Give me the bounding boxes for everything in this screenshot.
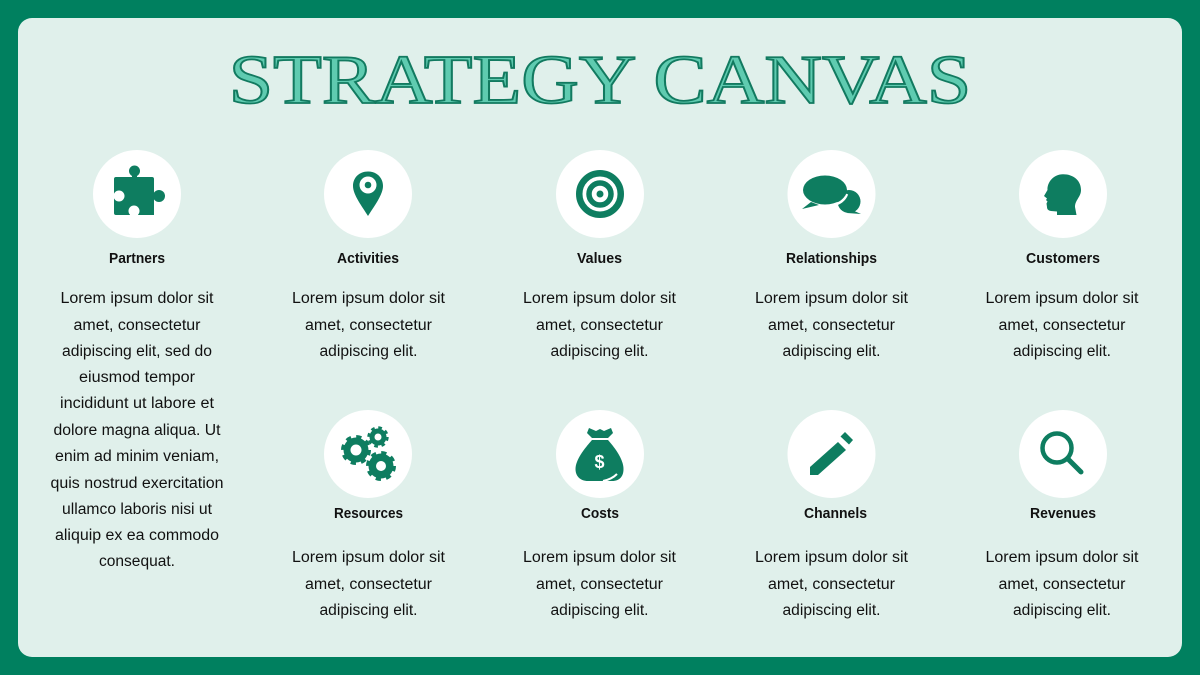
text block: customers [986,290,1139,360]
title: STRATEGY CANVAS [229,41,971,119]
heading: activities: Activities [337,251,399,267]
text block: costs: adipiscing elit. [550,602,648,619]
text block: resources: amet, consectetur [305,576,432,593]
text block: partners: consequat. [99,553,175,570]
icon: magnifier [1019,410,1107,498]
panel: activities [292,150,446,360]
text block: activities: Lorem ipsum dolor sit [292,290,446,307]
heading: revenues: Revenues [1030,506,1096,522]
text block: partners: aliquip ex ea commodo [55,527,219,544]
text block: partners: dolore magna aliqua. Ut [54,422,221,439]
text block: partners: adipiscing elit, sed do [62,343,212,360]
text block: costs: amet, consectetur [536,576,663,593]
icon: target [556,150,644,238]
text block: partners: incididunt ut labore et [60,395,215,412]
icon: gears [324,410,412,498]
panel: resources [292,410,446,619]
text block: values: amet, consectetur [536,317,663,334]
heading: costs: Costs [581,506,619,522]
text block: relationships: Lorem ipsum dolor sit [755,290,909,307]
text block: channels [755,549,909,619]
heading: customers: Customers [1026,251,1100,267]
text block: revenues: amet, consectetur [998,576,1126,593]
panel: revenues [986,410,1139,619]
panel: channels [755,410,909,619]
icon: puzzle piece [93,150,181,238]
text block: costs: Lorem ipsum dolor sit [523,549,677,566]
text block: relationships: amet, consectetur [768,317,895,334]
text block: partners [50,290,224,570]
heading: values: Values [577,251,622,267]
text block: partners: amet, consectetur [74,317,200,334]
text block: customers: Lorem ipsum dolor sit [986,290,1139,307]
text block: relationships: adipiscing elit. [782,343,880,360]
text block: partners: enim ad minim veniam, [55,448,219,465]
text block: resources: Lorem ipsum dolor sit [292,549,446,566]
text block: customers: adipiscing elit. [1013,343,1111,360]
text block: channels: amet, consectetur [768,576,895,593]
text block: resources [292,549,446,619]
text block: resources: adipiscing elit. [320,602,418,619]
text block: activities: amet, consectetur [305,317,432,334]
text block: values [523,290,677,360]
icon: pencil [788,410,876,498]
heading: resources: Resources [334,506,403,522]
text block: partners: Lorem ipsum dolor sit [60,290,214,307]
heading: relationships: Relationships [786,251,877,267]
text block: revenues: adipiscing elit. [1013,602,1111,619]
text block: activities [292,290,446,360]
text block: customers: amet, consectetur [998,317,1126,334]
text block: values: adipiscing elit. [550,343,648,360]
text block: partners: ullamco laboris nisi ut [62,501,213,518]
panel: relationships [755,150,909,360]
icon: money bag: $ [594,452,605,472]
icon: speech bubbles [788,150,876,238]
panel: customers [986,150,1139,360]
text block: relationships [755,290,909,360]
text block: costs [523,549,677,619]
text block: revenues [986,549,1139,619]
icon: map pin [324,150,412,238]
icon: head silhouette [1019,150,1107,238]
text block: partners: quis nostrud exercitation [50,475,224,492]
text block: channels: Lorem ipsum dolor sit [755,549,909,566]
text block: values: Lorem ipsum dolor sit [523,290,677,307]
text block: activities: adipiscing elit. [320,343,418,360]
panel: values [523,150,677,360]
text block: channels: adipiscing elit. [782,602,880,619]
text block: revenues: Lorem ipsum dolor sit [986,549,1139,566]
icon: money bag [556,410,644,498]
heading: partners: Partners [109,251,165,267]
heading: channels: Channels [804,506,867,522]
panel: partners [50,150,224,570]
panel: costs [523,410,677,619]
text block: partners: eiusmod tempor [79,369,195,386]
